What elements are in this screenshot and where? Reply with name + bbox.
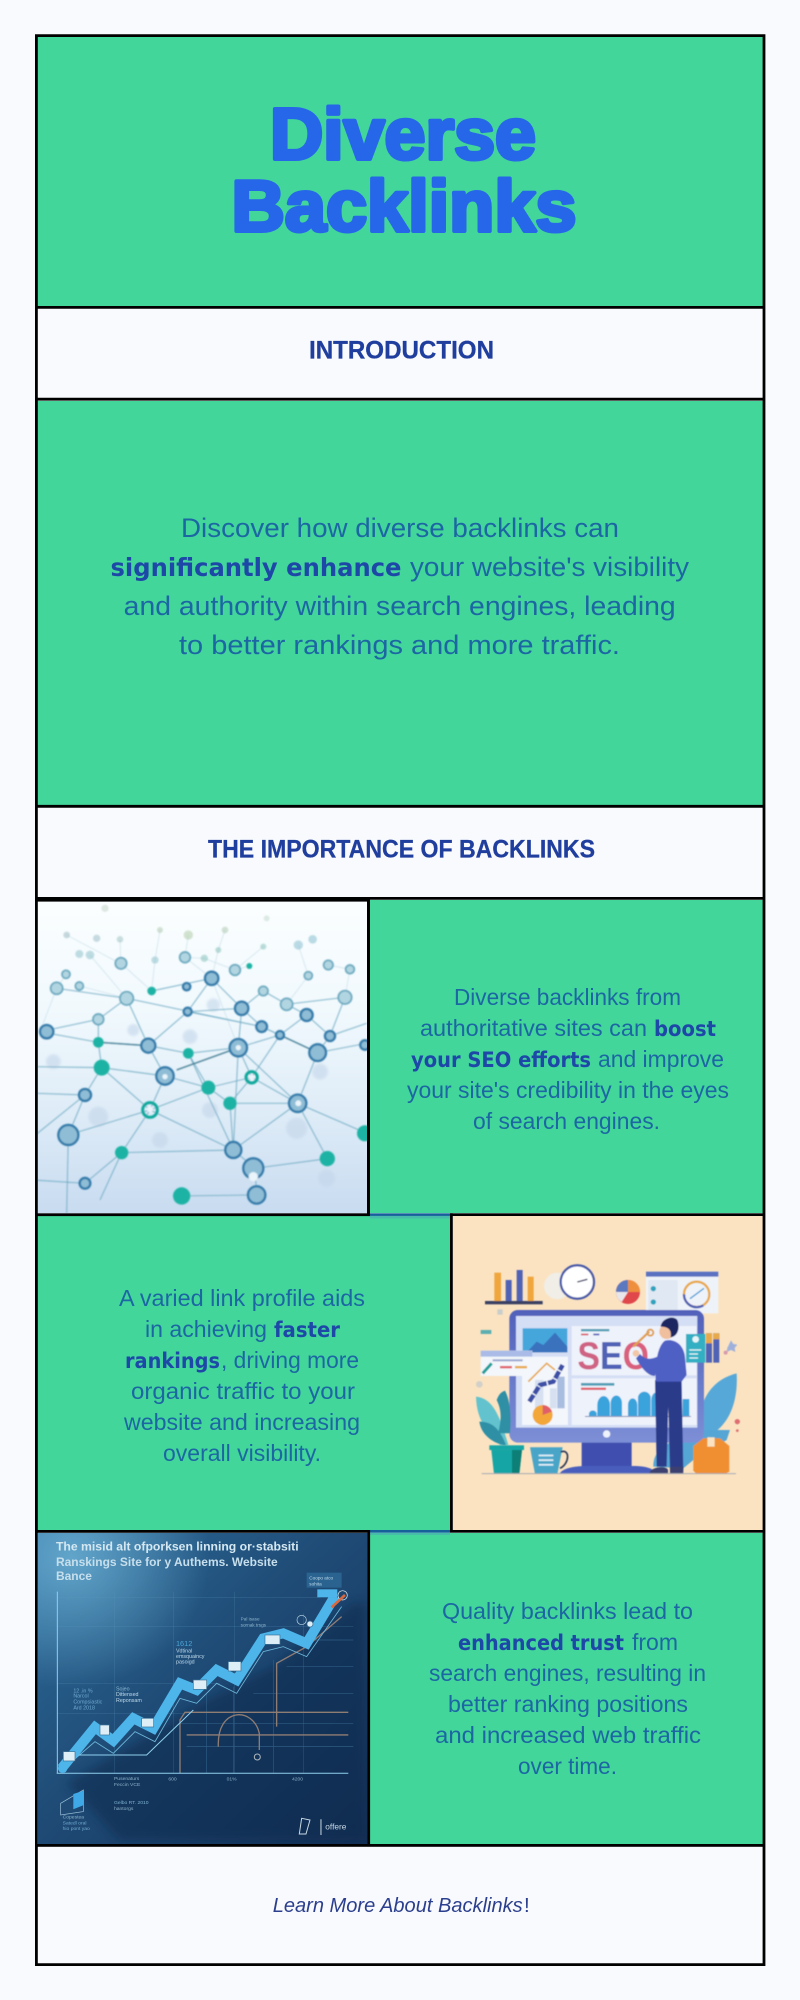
panel: row one text: and improve (598, 1046, 724, 1072)
text block: introduction (110, 513, 690, 660)
text: chart small labels: 1612 (176, 1639, 192, 1648)
panel: row one text: boost (654, 1017, 716, 1041)
panel: row one text: your site's credibility in the eyes (407, 1077, 729, 1103)
image: network of connected nodes (33, 901, 373, 1213)
text: chart small labels: hantorgs (114, 1806, 134, 1812)
text: chart small labels: Feccin VCE (114, 1782, 141, 1788)
text block: introduction: Discover how diverse backlinks can (181, 513, 619, 543)
panel: introduction heading: INTRODUCTION (309, 336, 494, 364)
panel: row two text: overall visibility. (163, 1440, 321, 1466)
text: SEO: SEO (577, 1334, 649, 1378)
panel: row two text: A varied link profile aids (119, 1285, 365, 1311)
title: Diverse Backlinks (232, 95, 576, 247)
panel: importance heading (37, 808, 763, 897)
text: chart title: Ranskings Site for y Authems. Website (56, 1555, 278, 1569)
text: chart small labels: Pal isase (241, 1617, 260, 1622)
icon: clock (544, 1265, 594, 1299)
panel: row two text: , driving more (221, 1347, 359, 1373)
icon: small clipboard (686, 1333, 740, 1432)
text: chart small labels: 4200 (292, 1777, 303, 1783)
image: SEO illustration with monitor and person (453, 1216, 763, 1530)
panel: row two text (37, 1216, 450, 1530)
icon: big leaf (699, 1373, 737, 1437)
text: chart small labels: Satedl oral (63, 1820, 87, 1826)
title: Diverse Backlinks: Backlinks (232, 167, 576, 247)
panel: closing call to action: Learn More About Backlinks (273, 1894, 523, 1917)
text: chart small labels: hio pont yao (63, 1826, 90, 1832)
text: chart small labels: Vdtinal (176, 1649, 192, 1655)
panel: row one text (370, 900, 763, 1213)
text: chart title: Bance (56, 1569, 92, 1583)
panel: closing call to action: ! (524, 1894, 530, 1917)
image: dark blue rising ranking chart (38, 1533, 368, 1844)
text: chart small labels: emsquaincy (176, 1654, 205, 1660)
panel: row three text: from (632, 1629, 678, 1655)
text: chart small labels: 01% (227, 1777, 237, 1783)
panel: row two text: faster (274, 1318, 341, 1342)
icon: mug (530, 1447, 568, 1474)
panel: introduction heading (37, 309, 763, 398)
text block: introduction: your website's visibility (410, 552, 690, 582)
text: chart small labels: Dittensed (116, 1692, 139, 1698)
panel: row three text: enhanced trust (458, 1631, 624, 1655)
text: chart small labels: Reponsam (116, 1698, 142, 1704)
panel: row two text: website and increasing (123, 1409, 360, 1435)
panel: row three text: search engines, resulting in (429, 1660, 706, 1686)
text: chart small labels (63, 1576, 347, 1832)
text: chart title: The misid alt ofporksen linning or·stabsiti (56, 1540, 299, 1554)
text: chart small labels: Ard 2018 (73, 1706, 95, 1712)
panel: row three text: and increased web traffic (435, 1722, 701, 1748)
text: chart small labels: sornak trsgs (241, 1623, 267, 1628)
panel: row three text (370, 1533, 763, 1844)
text: chart title (56, 1542, 298, 1580)
panel: row one text: your SEO efforts (411, 1048, 591, 1072)
panel: title (37, 36, 763, 306)
panel: row two text: rankings (125, 1349, 220, 1373)
icon: monitor (509, 1310, 704, 1474)
icon: notification card (481, 1351, 532, 1376)
text: chart small labels: Compsiastic (73, 1700, 103, 1706)
panel: introduction text (37, 401, 763, 805)
icon: pie chart (616, 1280, 640, 1304)
text: chart small labels: Gelbo RT. 2010 (114, 1800, 149, 1806)
panel: row three text: over time. (518, 1753, 617, 1779)
panel: row three text: Quality backlinks lead to (442, 1598, 693, 1624)
text block: introduction: and authority within search engines, leading (124, 591, 676, 621)
panel: row two text: organic traffic to your (131, 1378, 355, 1404)
text: chart small labels: offere (325, 1821, 347, 1831)
text: chart small labels: pasoigd (176, 1659, 195, 1665)
icon: dashboard window (646, 1272, 718, 1313)
panel: closing call to action (37, 1847, 763, 1963)
text: chart small labels: sohita (309, 1581, 322, 1586)
text: chart small labels: Sojeo (116, 1686, 130, 1692)
text: chart small labels: Copestea (63, 1815, 84, 1821)
text: chart small labels: 600 (168, 1777, 177, 1783)
text: chart small labels: Coopo atco (309, 1576, 334, 1581)
panel: importance heading: THE IMPORTANCE OF BACKLINKS (208, 836, 595, 864)
panel: row one text: authoritative sites can (420, 1015, 647, 1041)
panel: row two text: in achieving (145, 1316, 267, 1342)
icon: person (633, 1318, 687, 1474)
title: Diverse Backlinks: Diverse (270, 95, 536, 175)
icon: bar chart (485, 1270, 543, 1304)
icon: potted plant (476, 1391, 524, 1474)
text: chart small labels: Pusenaturs (114, 1776, 140, 1782)
icon: orange box (693, 1437, 729, 1474)
text: chart small labels: 12 .in % (73, 1688, 93, 1694)
text block: introduction: to better rankings and more traffic. (179, 630, 620, 660)
panel: row three text: better ranking positions (448, 1691, 688, 1717)
panel: row one text: Diverse backlinks from (454, 984, 681, 1010)
text block: introduction: significantly enhance (110, 553, 402, 582)
text: chart small labels: Narcol (73, 1694, 89, 1700)
panel: row one text: of search engines. (473, 1108, 660, 1134)
